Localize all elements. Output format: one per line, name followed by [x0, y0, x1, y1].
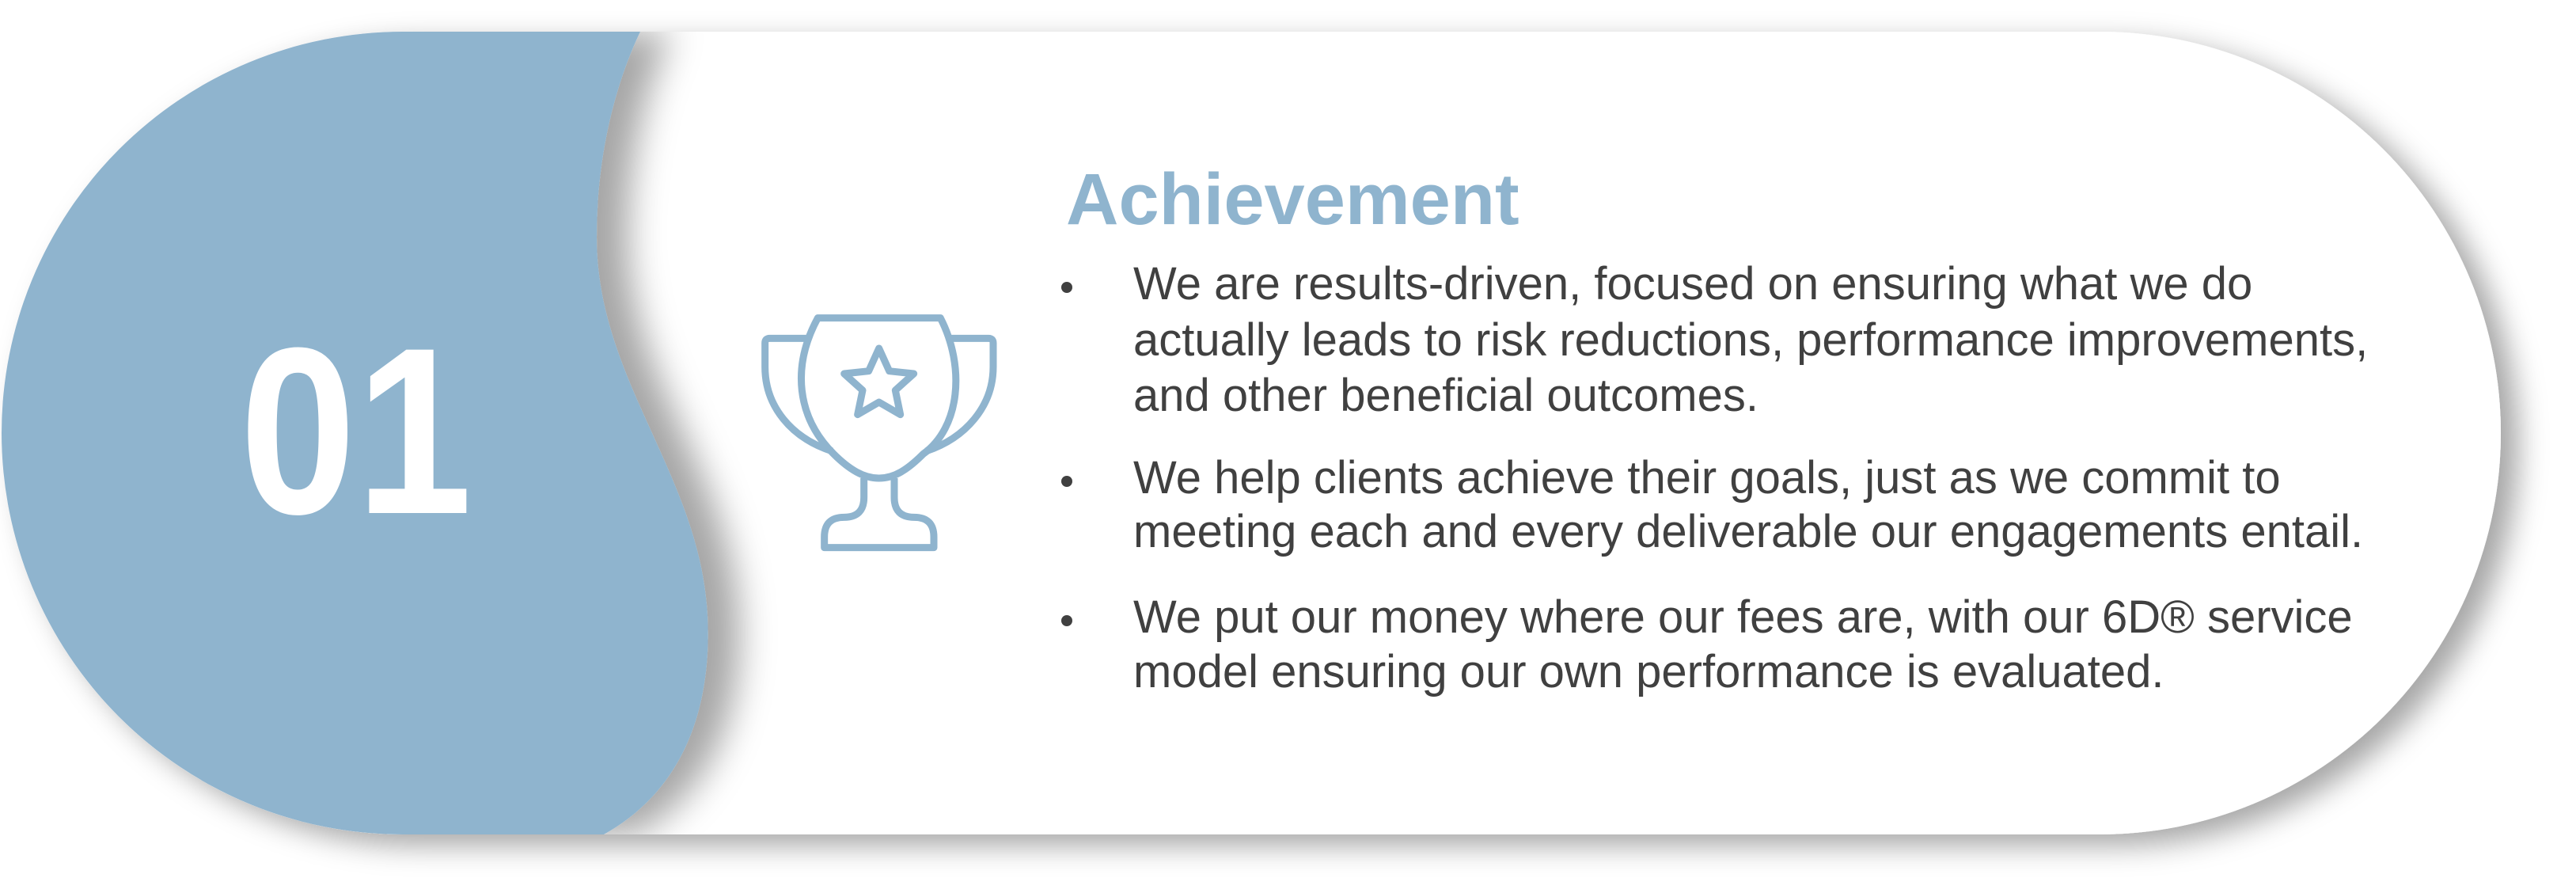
icon: trophy: [761, 314, 997, 551]
heading: Achievement: Achievement: [1066, 159, 1519, 240]
bullet 1: We are results-driven, focused on ensuring what we do: [1133, 258, 2252, 310]
bullet 2: meeting each and every deliverable our engagements entail.: [1133, 506, 2363, 557]
number 01: 01: [240, 298, 472, 564]
bullet 2: We help clients achieve their goals, just as we commit to: [1133, 452, 2281, 504]
bullet 1: actually leads to risk reductions, performance improvements,: [1133, 314, 2368, 366]
bullet 3: model ensuring our own performance is evaluated.: [1133, 646, 2164, 697]
bullet 3: We put our money where our fees are, with our 6D® service: [1133, 591, 2353, 643]
bullet 1: and other beneficial outcomes.: [1133, 370, 1758, 421]
bullet list: [1061, 258, 2368, 697]
